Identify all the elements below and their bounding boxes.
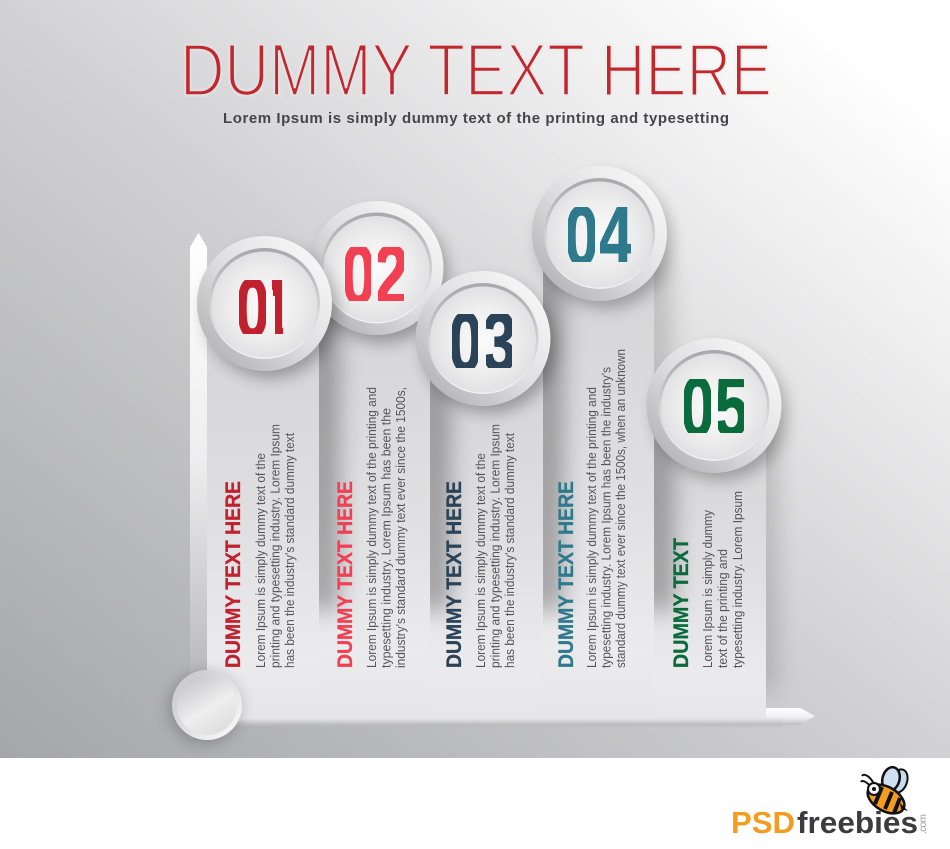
body text 4: standard dummy text ever since the 1500s, when an unknown bbox=[614, 349, 628, 668]
panel shadows on background bbox=[640, 260, 776, 690]
body text 5: typesetting industry. Lorem Ipsum bbox=[731, 491, 745, 668]
heading 3: DUMMY TEXT HERE bbox=[443, 481, 466, 668]
white footer bbox=[0, 758, 950, 849]
arrow: horizontal axis bbox=[230, 708, 815, 725]
body text 3: printing and typesetting industry. Lorem Ipsum bbox=[488, 424, 502, 668]
number 05: 05 bbox=[680, 359, 749, 454]
logo wordmark: freebies bbox=[797, 805, 918, 840]
body text 4 bbox=[585, 349, 628, 668]
panel 1 bbox=[207, 300, 319, 722]
badge 03 bbox=[416, 271, 555, 413]
body text 2: typesetting industry. Lorem Ipsum has been the bbox=[380, 408, 394, 668]
badge 05 bbox=[646, 338, 786, 480]
logo bbox=[731, 765, 929, 840]
body text 3 bbox=[474, 424, 517, 668]
heading 2: DUMMY TEXT HERE bbox=[334, 481, 357, 668]
bottom edge strip bbox=[207, 719, 782, 726]
icon: bee bbox=[861, 765, 911, 819]
panel 5 bbox=[654, 436, 766, 718]
body text 4: Lorem Ipsum is simply dummy text of the printing and bbox=[585, 387, 599, 668]
body text 5: Lorem Ipsum is simply dummy bbox=[701, 509, 715, 668]
number 03: 03 bbox=[448, 294, 517, 389]
logo domain: .com bbox=[918, 814, 929, 834]
body text 4: typesetting industry. Lorem Ipsum has been the industry's bbox=[600, 367, 614, 668]
title: DUMMY TEXT HERE bbox=[180, 28, 772, 112]
body text 1 bbox=[254, 424, 297, 668]
number 01: 1 bbox=[259, 260, 293, 355]
body text 5: text of the printing and bbox=[716, 549, 730, 668]
logo wordmark: PSD bbox=[731, 805, 795, 840]
body text 2 bbox=[365, 387, 408, 668]
heading 4: DUMMY TEXT HERE bbox=[555, 481, 578, 668]
body text 2: industry's standard dummy text ever since the 1500s, bbox=[394, 387, 408, 668]
body text 1: Lorem Ipsum is simply dummy text of the bbox=[254, 453, 268, 668]
body text 5 bbox=[701, 491, 745, 668]
badge 04 bbox=[532, 166, 671, 308]
subtitle: Lorem Ipsum is simply dummy text of the printing and typesetting bbox=[223, 110, 729, 127]
arrow: vertical axis bbox=[190, 233, 207, 680]
body text 3: Lorem Ipsum is simply dummy text of the bbox=[474, 453, 488, 668]
panel 4 bbox=[543, 270, 654, 718]
body text 1: has been the industry's standard dummy text bbox=[283, 433, 297, 668]
heading 1: DUMMY TEXT HERE bbox=[222, 481, 245, 668]
heading 5: DUMMY TEXT bbox=[670, 538, 693, 668]
panel 2 bbox=[319, 317, 430, 718]
body text 2: Lorem Ipsum is simply dummy text of the printing and bbox=[365, 387, 379, 668]
body text 3: has been the industry's standard dummy text bbox=[503, 433, 517, 668]
number 01 bbox=[239, 280, 283, 334]
panel 3 bbox=[430, 380, 543, 718]
badge 02 bbox=[310, 201, 448, 343]
number 01: 0 bbox=[236, 260, 270, 355]
body text 1: printing and typesetting industry. Lorem Ipsum bbox=[268, 424, 282, 668]
number 04: 04 bbox=[564, 188, 633, 283]
badge 01 bbox=[197, 236, 336, 378]
knob: axis origin bbox=[170, 670, 242, 743]
number 02: 02 bbox=[342, 227, 408, 322]
